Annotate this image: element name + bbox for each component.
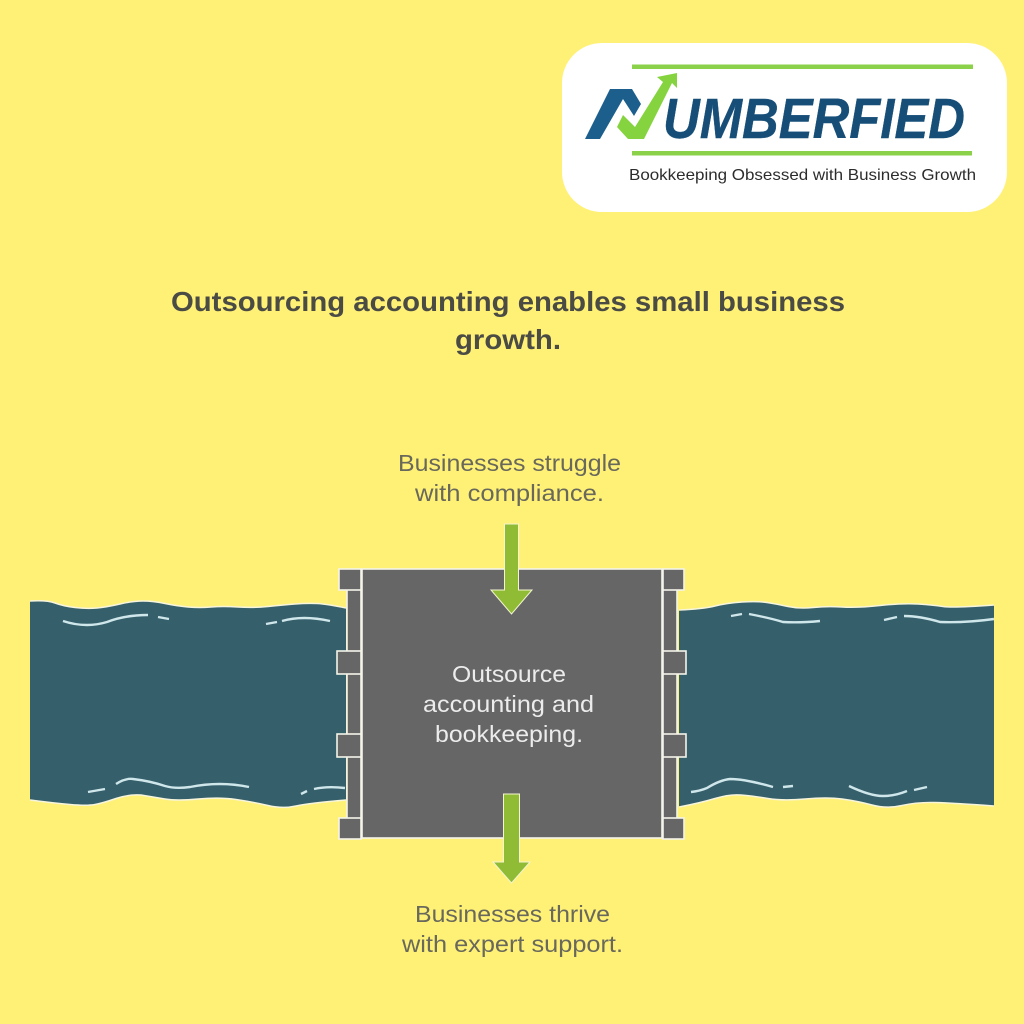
dam right rail [663,585,677,823]
dam left caps [337,569,361,839]
arrow: down into dam [491,524,532,614]
logo card [562,43,1007,212]
right river [679,602,994,807]
dam text: accounting and [423,691,594,717]
logo wordmark: UMBERFIED [663,87,965,151]
output label: businesses thrive: Businesses thrive [415,901,610,927]
dam left rail [347,585,361,823]
title: Outsourcing accounting enables small business [171,286,845,317]
title [171,286,845,355]
arrow: down out of dam [493,794,530,883]
left river [30,601,346,807]
dam main block [362,569,662,838]
dam text [423,661,594,747]
title: growth. [455,324,561,355]
input label: businesses struggle [398,450,621,506]
output label: businesses thrive [401,901,623,957]
dam text: bookkeeping. [435,721,583,747]
logo mark: green growth arrow [617,73,677,139]
central dam [337,569,686,839]
logo mark: blue N [585,89,641,139]
logo tagline: Bookkeeping Obsessed with Business Growth [629,167,976,184]
input label: businesses struggle: Businesses struggle [398,450,621,476]
dam text: Outsource [452,661,566,687]
input label: businesses struggle: with compliance. [414,480,604,506]
output label: businesses thrive: with expert support. [401,931,623,957]
dam right caps [663,569,686,839]
